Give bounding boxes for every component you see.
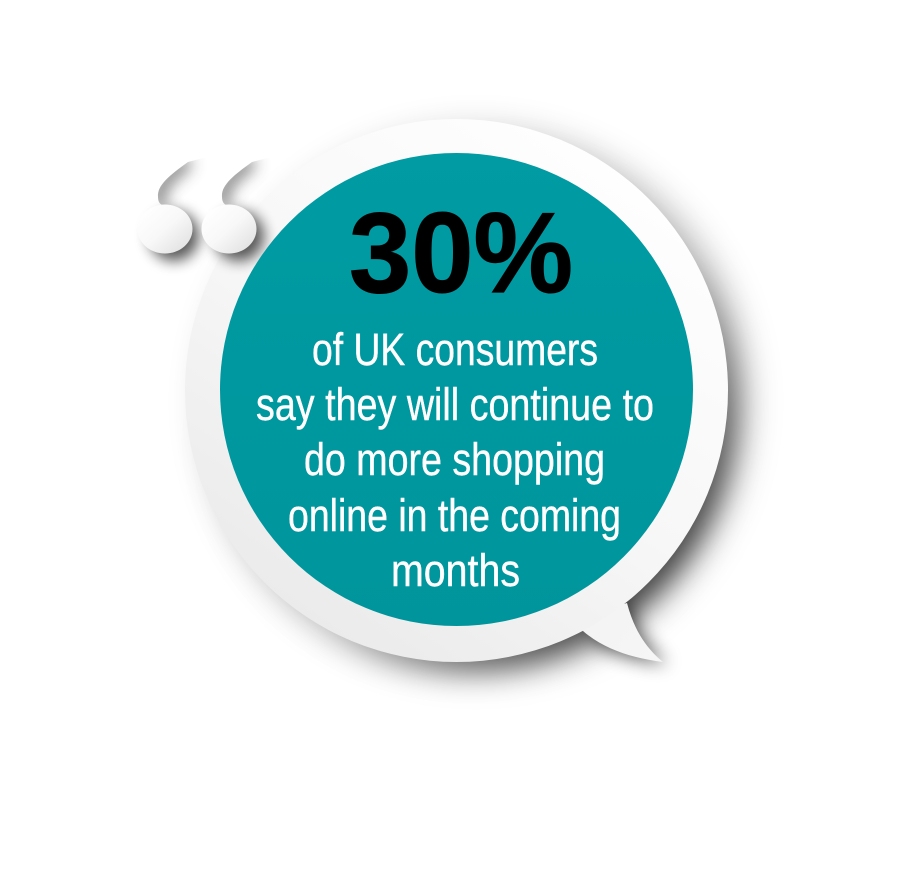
right quote dot [202, 204, 256, 254]
speech bubble shadow [195, 129, 744, 671]
teal circle [220, 153, 693, 626]
infographic canvas [139, 112, 766, 696]
left quote dot [138, 204, 192, 254]
bubble tail [570, 603, 663, 662]
statement text: online in the coming [288, 490, 621, 541]
bubble ring [185, 119, 728, 662]
statement text: of UK consumers [312, 324, 598, 375]
statement text: say they will continue to [256, 379, 654, 430]
quotation marks [138, 160, 256, 254]
right quote tail shadow [222, 160, 252, 206]
left quote tail shadow [158, 160, 188, 206]
quotation dot shadows [149, 211, 264, 261]
headline figure: 30% [349, 190, 573, 317]
statement text: do more shopping [304, 434, 605, 485]
speech bubble [149, 119, 728, 662]
statement text [256, 324, 654, 596]
statement text: months [391, 545, 520, 596]
